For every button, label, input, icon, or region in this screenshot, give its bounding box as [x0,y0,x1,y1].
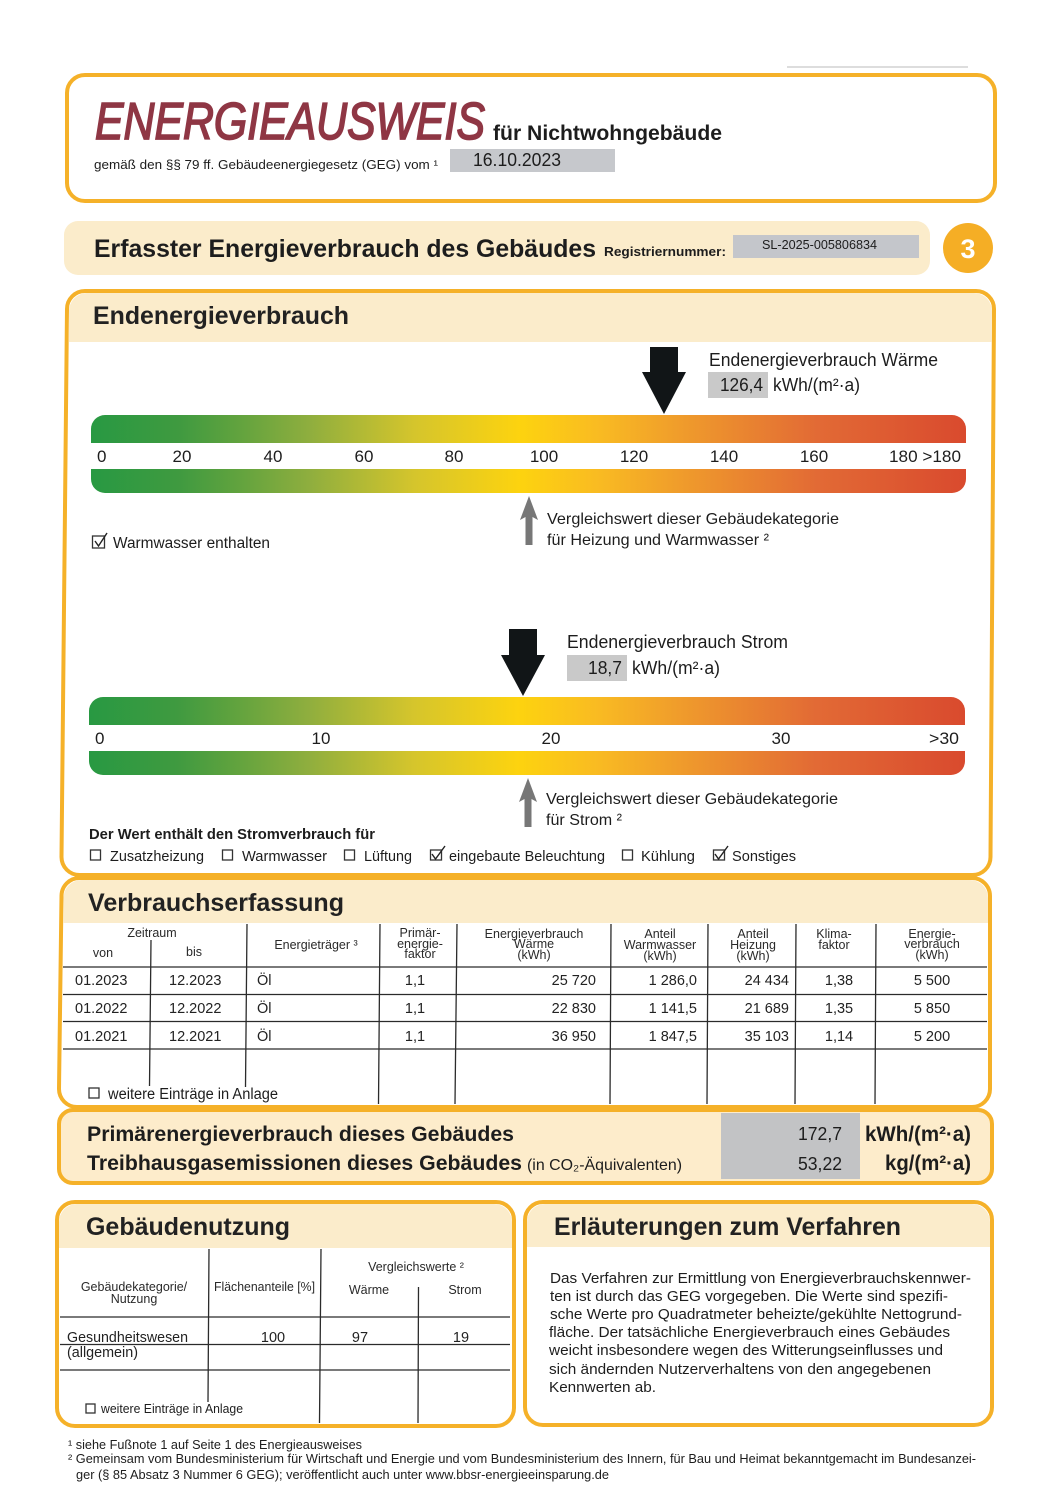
label: electricity consumption value [567,632,788,681]
heading: Erläuterungen zum Verfahren: Erläuterungen zum Verfahren [554,1213,901,1241]
table row 2022: Öl [257,999,272,1017]
chart: heat scale bar: 40 [264,447,282,466]
table row 2023: 01.2023 [75,973,127,989]
explanatory text [548,1271,971,1396]
table: building use [60,1249,510,1423]
table row 2021: 1,1 [405,1029,425,1045]
checkbox row: included electricity uses [90,846,796,865]
table row 2023: 1,1 [405,973,425,989]
table: building use: (allgemein) [67,1345,138,1361]
table: building use: 97 [352,1330,368,1346]
table header: Energieverbrauch [485,927,583,941]
chart: heat scale bar [91,415,966,493]
panel: title header [67,75,995,201]
table header: faktor [404,947,436,961]
table header: Wärme [514,937,554,951]
chart: heat scale bar: 100 [530,447,558,466]
table row 2021: 1,14 [825,1029,853,1045]
explanatory text: Kennwerten ab. [549,1380,656,1396]
date field: 16.10.2023 [473,150,561,170]
table header: Warmwasser [624,938,696,952]
page number badge [943,223,993,273]
table row 2022: 22 830 [552,1001,596,1017]
checkbox: weitere Einträge: weitere Einträge in Anlage [107,1086,278,1103]
table header: verbrauch [904,937,960,951]
chart: heat scale bar: 160 [800,447,828,466]
checkbox row: included electricity uses: Kühlung [641,848,695,865]
values: kWh/(m²·a) [865,1123,971,1146]
page number badge: 3 [960,234,976,264]
table: building use: Strom [448,1283,482,1297]
table header [93,926,960,963]
label: electricity consumption value: Endenergieverbrauch Strom [567,632,788,652]
label: greenhouse gas emissions: Treibhausgasemissionen dieses Gebäudes [87,1151,522,1175]
table: consumption records [63,924,987,1104]
arrow: heat consumption marker [642,347,686,414]
table header: Anteil [644,927,676,941]
chart: heat scale bar: 140 [710,447,738,466]
table row 2023: Öl [257,971,272,989]
registration label: Registriernummer: [604,245,726,259]
panel: primary energy and emissions [59,1110,992,1183]
label: electricity consumption value: kWh/(m²·a) [632,658,720,678]
table: building use: Wärme [349,1283,389,1297]
table: building use: Vergleichswerte ² [368,1260,464,1274]
chart: electricity scale bar [89,697,965,775]
table row 2021: 5 200 [914,1029,950,1045]
panel: Gebäudenutzung [57,1202,514,1426]
explanatory text: Das Verfahren zur Ermittlung von Energieverbrauchskennwer- [550,1271,971,1287]
section heading: Erfasster Energieverbrauch des Gebäudes [94,235,596,263]
label: electricity comparison value: Vergleichswert dieser Gebäudekategorie [546,791,838,808]
table header: Energie- [908,927,956,941]
label: heat consumption value: Endenergieverbrauch Wärme [709,350,938,370]
table: building use: Nutzung [111,1292,157,1306]
table row 2022 [75,999,950,1017]
chart: electricity scale bar: 10 [312,729,330,748]
table header: Anteil [737,927,769,941]
table row 2022: 1 141,5 [649,1001,697,1017]
label: primary energy: Primärenergieverbrauch dieses Gebäudes [87,1122,514,1146]
date field [450,149,615,172]
explanatory text: weicht insbesondere wegen des Witterungseinflusses und [548,1343,943,1359]
table row 2023: 1,38 [825,973,853,989]
registration number field [733,235,919,258]
label: heat consumption value: kWh/(m²·a) [773,375,860,395]
label: heat consumption value: 126,4 [720,375,763,395]
checkbox row: included electricity uses: Zusatzheizung [110,848,204,865]
table header: (kWh) [736,949,770,963]
chart: electricity scale bar: 30 [772,729,790,748]
panel: Erläuterungen zum Verfahren [525,1202,992,1425]
panel: Endenergieverbrauch [62,291,994,875]
label: heat comparison value: für Heizung und Warmwasser ² [547,532,770,549]
table: building use: Gebäudekategorie/ [81,1280,188,1294]
label: included electricity uses: Der Wert enthält den Stromverbrauch für [89,827,375,843]
checkbox row: included electricity uses: Lüftung [364,848,412,865]
values: 172,7 [798,1124,842,1144]
table row 2022: 21 689 [745,1001,789,1017]
table row 2021: 12.2021 [169,1029,221,1045]
explanatory text: sche Werte pro Quadratmeter beheizte/gekühlte Nettogrund- [550,1307,962,1323]
arrow: heat comparison value [520,496,538,545]
arrow: electricity comparison value [519,778,537,827]
values: 53,22 [798,1154,842,1174]
chart: heat scale bar: 0 [97,447,106,466]
label: electricity consumption value: 18,7 [588,658,622,678]
table row 2021: 1 847,5 [649,1029,697,1045]
checkbox: Warmwasser enthalten: Warmwasser enthalten [113,535,270,552]
table: building use: Flächenanteile [%] [214,1280,315,1294]
table row 2023: 24 434 [745,973,789,989]
chart: heat scale bar: 80 [445,447,463,466]
checkbox row: included electricity uses: eingebaute Beleuchtung [449,848,605,865]
table row 2021: 35 103 [745,1029,789,1045]
table header: bis [186,945,202,959]
table row 2021: 01.2021 [75,1029,127,1045]
table: building use: Gesundheitswesen [67,1330,188,1346]
table header: Klima- [816,927,852,941]
table row 2021: 36 950 [552,1029,596,1045]
label: greenhouse gas emissions: (in CO₂-Äquivalenten) [527,1156,682,1174]
chart: electricity scale bar: 0 [95,729,104,748]
heading: Gebäudenutzung: Gebäudenutzung [86,1213,290,1241]
legal reference text: gemäß den §§ 79 ff. Gebäudeenergiegesetz (GEG) vom ¹ [94,157,439,172]
values [798,1123,971,1175]
table row 2023 [75,971,950,989]
section heading strip [64,221,930,275]
footnotes: ¹ siehe Fußnote 1 auf Seite 1 des Energieausweises [68,1438,362,1452]
table header: faktor [818,938,850,952]
registration number field: SL-2025-005806834 [762,238,877,252]
table row 2023: 25 720 [552,973,596,989]
table header: (kWh) [643,949,677,963]
table row 2023: 12.2023 [169,973,221,989]
table header: Heizung [730,938,776,952]
chart: heat scale bar: 180 >180 [889,447,961,466]
table row 2023: 5 500 [914,973,950,989]
panel: Verbrauchserfassung [59,878,990,1107]
chart: electricity scale bar: >30 [929,729,959,748]
explanatory text: ten ist durch das GEG vorgegeben. Die Werte sind spezifi- [550,1289,948,1305]
grey value field [721,1113,860,1179]
values: kg/(m²·a) [885,1152,971,1175]
table row 2021: Öl [257,1027,272,1045]
table header: von [93,946,113,960]
title: Energieausweis: ENERGIEAUSWEIS [95,93,485,151]
table header: energie- [397,937,443,951]
table row 2022: 1,35 [825,1001,853,1017]
chart: electricity scale bar: 20 [542,729,560,748]
label: electricity comparison value: für Strom ² [546,812,623,829]
table: building use: 19 [453,1330,469,1346]
footnotes [68,1438,976,1482]
chart: heat scale bar: 60 [355,447,373,466]
explanatory text: sich ändernden Nutzerverhaltens von den angegebenen [549,1362,931,1378]
table header: Zeitraum [127,926,177,940]
label: heat comparison value [547,511,839,549]
chart: heat scale bar: 20 [173,447,191,466]
label: electricity comparison value [546,791,838,829]
table row 2021 [75,1027,950,1045]
footnotes: ger (§ 85 Absatz 3 Nummer 6 GEG); veröffentlicht auch unter www.bbsr-energieeinsparung.de [76,1468,609,1482]
table row 2023: 1 286,0 [649,973,697,989]
explanatory text: fläche. Der tatsächliche Energieverbrauch eines Gebäudes [549,1325,950,1341]
table row 2022: 5 850 [914,1001,950,1017]
arrow: electricity consumption marker [501,629,545,696]
heading: Verbrauchserfassung: Verbrauchserfassung [88,889,344,917]
table: building use: 100 [261,1330,285,1346]
table header: (kWh) [915,948,949,962]
checkbox row: included electricity uses: Warmwasser [242,848,327,865]
checkbox: weitere Einträge: weitere Einträge in Anlage [100,1401,243,1416]
subtitle: für Nichtwohngebäude [493,122,722,145]
chart: heat scale bar: 120 [620,447,648,466]
label: heat comparison value: Vergleichswert dieser Gebäudekategorie [547,511,839,528]
table row 2022: 1,1 [405,1001,425,1017]
label: heat consumption value [708,350,938,398]
table header: Energieträger ³ [274,938,358,952]
table header: (kWh) [517,948,551,962]
table row 2022: 01.2022 [75,1001,127,1017]
table header: Primär- [400,926,440,940]
footnotes: ² Gemeinsam vom Bundesministerium für Wirtschaft und Energie und vom Bundesministerium des Innern, für Bau und Heimat bekanntgemacht im Bundesanzei- [68,1452,976,1466]
checkbox row: included electricity uses: Sonstiges [732,848,796,865]
table row 2022: 12.2022 [169,1001,221,1017]
heading: Endenergieverbrauch: Endenergieverbrauch [93,302,349,330]
